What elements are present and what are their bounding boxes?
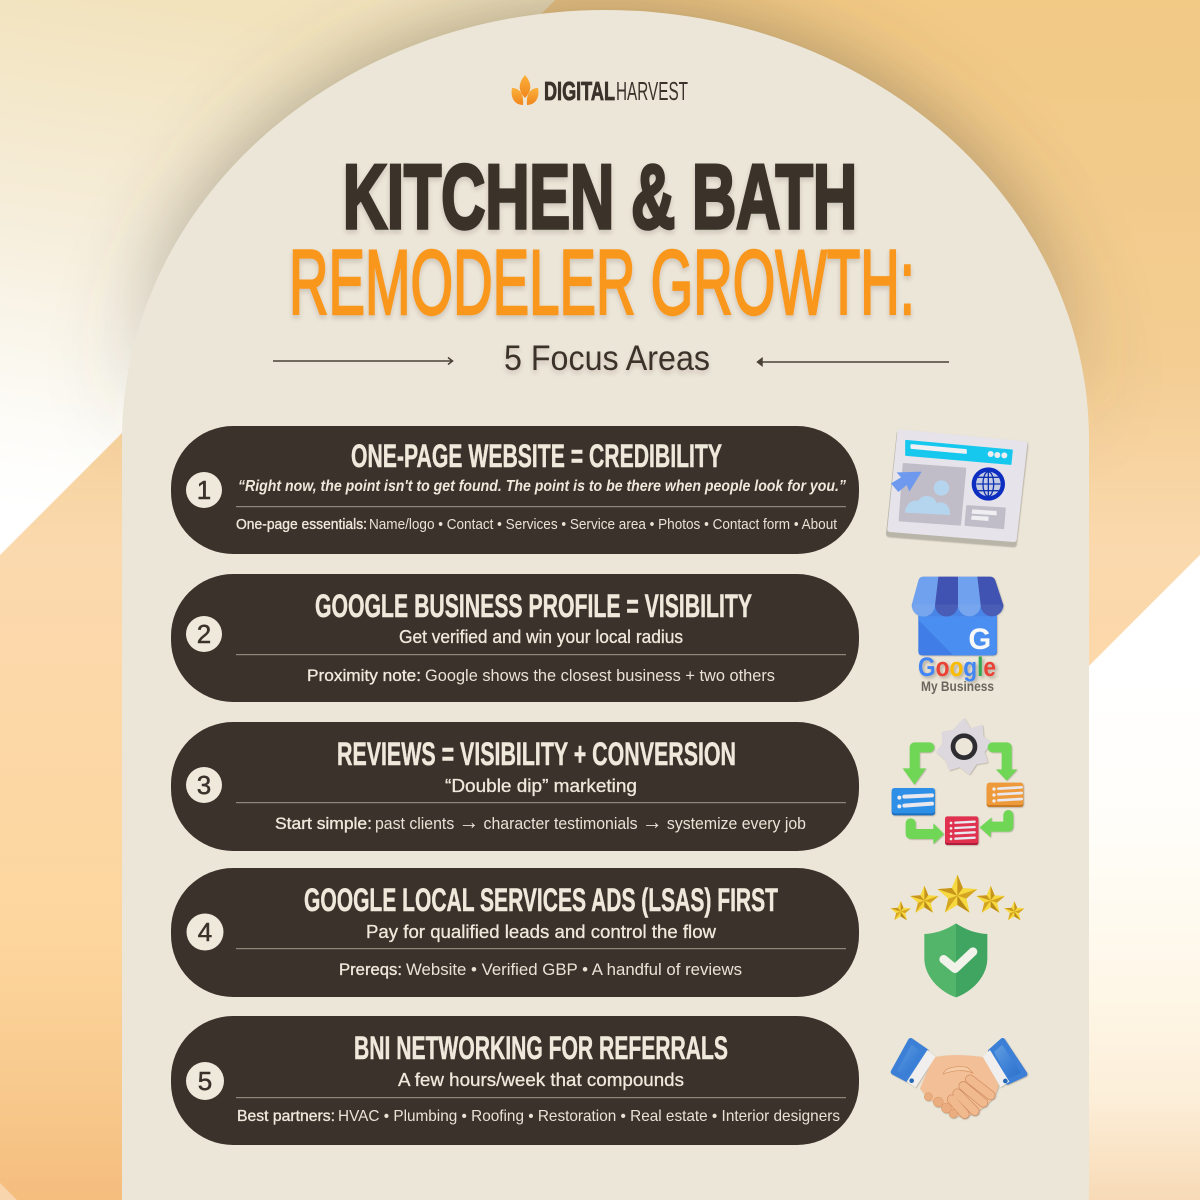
arrows [911,747,1008,834]
number 4: 4 [198,917,212,947]
number 2: 2 [197,619,211,649]
detail 1: One-page essentials: [236,516,367,533]
icon: Google My Business [912,577,1003,694]
panel: item 4 [171,868,859,997]
number 1 [186,472,222,508]
heading 3: REVIEWS = VISIBILITY + CONVERSION [337,736,736,772]
number 3 [186,767,222,803]
icon: five stars [891,875,1024,920]
orange card [987,783,1023,807]
icon: wheat leaves [512,75,538,105]
heading 2: GOOGLE BUSINESS PROFILE = VISIBILITY [315,588,752,624]
arch panel [122,10,1089,1200]
number 1: 1 [197,475,211,505]
number 2 [186,616,222,652]
red card [945,816,978,845]
G mark: G [968,623,991,656]
panel: item 5 [171,1016,859,1145]
number 3: 3 [197,770,211,800]
title line 1: KITCHEN & BATH [343,147,857,248]
detail 4: Prereqs: [339,960,402,979]
icon: browser window [889,432,1025,544]
number 4 [186,914,224,950]
blue card [892,788,935,815]
left sleeve [893,1041,926,1079]
detail 4: Website • Verified GBP • A handful of reviews [406,960,742,979]
panel: item 3 [171,722,859,851]
subheading 4: Pay for qualified leads and control the flow [366,922,717,942]
heading 4: GOOGLE LOCAL SERVICES ADS (LSAS) FIRST [304,882,778,918]
icon: handshake [893,1041,1025,1118]
logo wordmark: DIGITAL [544,76,615,106]
title [289,147,915,334]
thumb [943,1067,973,1074]
number 5 [186,1062,224,1100]
subheading 3: “Double dip” marketing [445,776,637,796]
gear [937,719,991,773]
Google wordmark: Google [918,652,996,682]
detail 2: Google shows the closest business + two others [425,666,775,685]
detail 1: Name/logo • Contact • Services • Service area • Photos • Contact form • About [369,516,838,533]
My Business label: My Business [921,679,994,694]
detail 2: Proximity note: [307,666,421,685]
detail 3: past clients → character testimonials → systemize every job [375,809,806,834]
quote 1: “Right now, the point isn't to get found. The point is to be there when people look for you.” [238,478,846,495]
logo wordmark: HARVEST [616,76,688,106]
heading 5: BNI NETWORKING FOR REFERRALS [354,1030,728,1066]
right-hand fingers [952,1079,991,1114]
arrow: left [273,358,452,364]
right sleeve [991,1041,1025,1082]
panel: item 2 [171,574,859,702]
left-hand fingers [924,1093,958,1118]
icon: process cycle [892,719,1023,845]
icon: shield check [924,923,987,997]
panel: item 1 [171,426,859,554]
subheading 2: Get verified and win your local radius [399,627,683,647]
detail 5: HVAC • Plumbing • Roofing • Restoration • Real estate • Interior designers [338,1108,840,1125]
subtitle: 5 Focus Areas [504,339,710,378]
subheading 5: A few hours/week that compounds [398,1070,684,1090]
heading 1: ONE-PAGE WEBSITE = CREDIBILITY [351,438,722,474]
logo: Digital Harvest [512,75,688,106]
arrow: right [758,358,949,366]
detail 3: Start simple: [275,814,372,833]
hands [920,1055,999,1117]
detail 5: Best partners: [237,1108,335,1125]
number 5: 5 [198,1066,212,1096]
